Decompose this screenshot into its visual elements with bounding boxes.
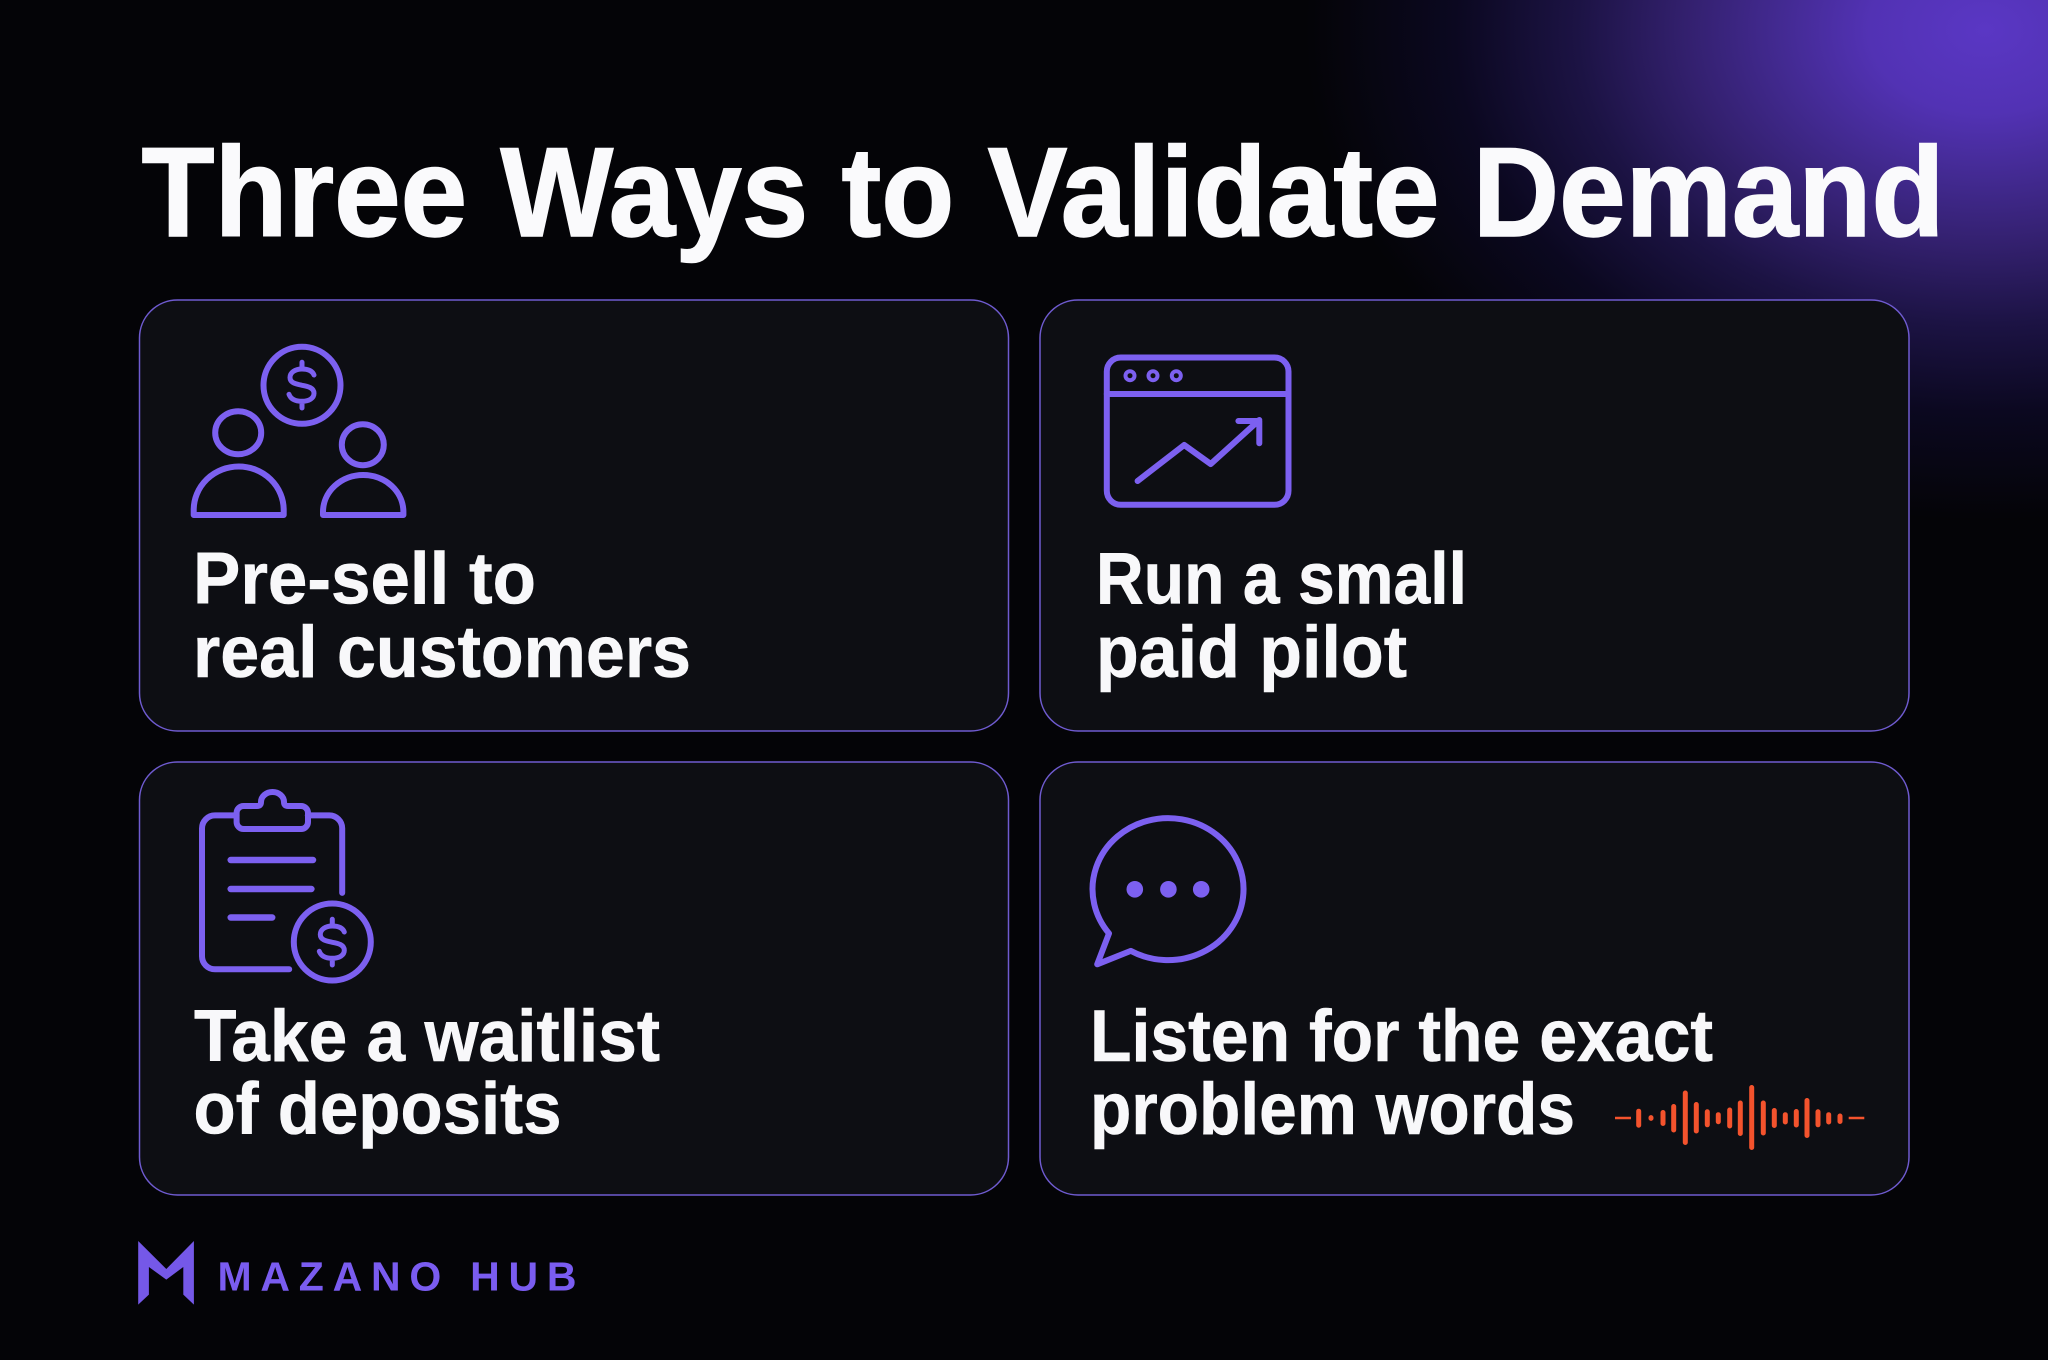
heading: pre-sell to real customers [193,538,691,693]
heading: take a waitlist of deposits: of deposits [194,1068,562,1149]
heading: listen for the exact problem words: Listen for the exact [1090,996,1713,1077]
heading: run a small paid pilot [1096,538,1467,693]
icon: speech bubble [1093,818,1244,964]
heading: take a waitlist of deposits: Take a waitlist [194,996,660,1077]
icon: orange sound waveform [1615,1088,1864,1148]
icon: M logo mark [138,1241,194,1305]
heading: listen for the exact problem words [1090,996,1713,1150]
heading: take a waitlist of deposits [194,996,660,1149]
panel: listen for the exact problem words [1040,762,1909,1195]
heading: listen for the exact problem words: problem words [1090,1069,1575,1150]
icon: customers with dollar coin [194,347,403,515]
icon: clipboard with dollar coin [202,792,371,980]
title: Three Ways to Validate Demand [142,121,1944,263]
wordmark: MAZANO HUB [218,1253,576,1299]
panel: take a waitlist of deposits [140,762,1008,1195]
panel: run a small paid pilot [1040,300,1909,731]
heading: pre-sell to real customers: real customers [193,612,691,693]
heading: run a small paid pilot: paid pilot [1096,612,1407,693]
logo: Mazano Hub [138,1241,576,1305]
heading: run a small paid pilot: Run a small [1096,538,1467,620]
heading: pre-sell to real customers: Pre-sell to [193,538,536,620]
panel: pre-sell to real customers [140,300,1008,731]
icon: browser window with rising chart [1107,358,1288,505]
